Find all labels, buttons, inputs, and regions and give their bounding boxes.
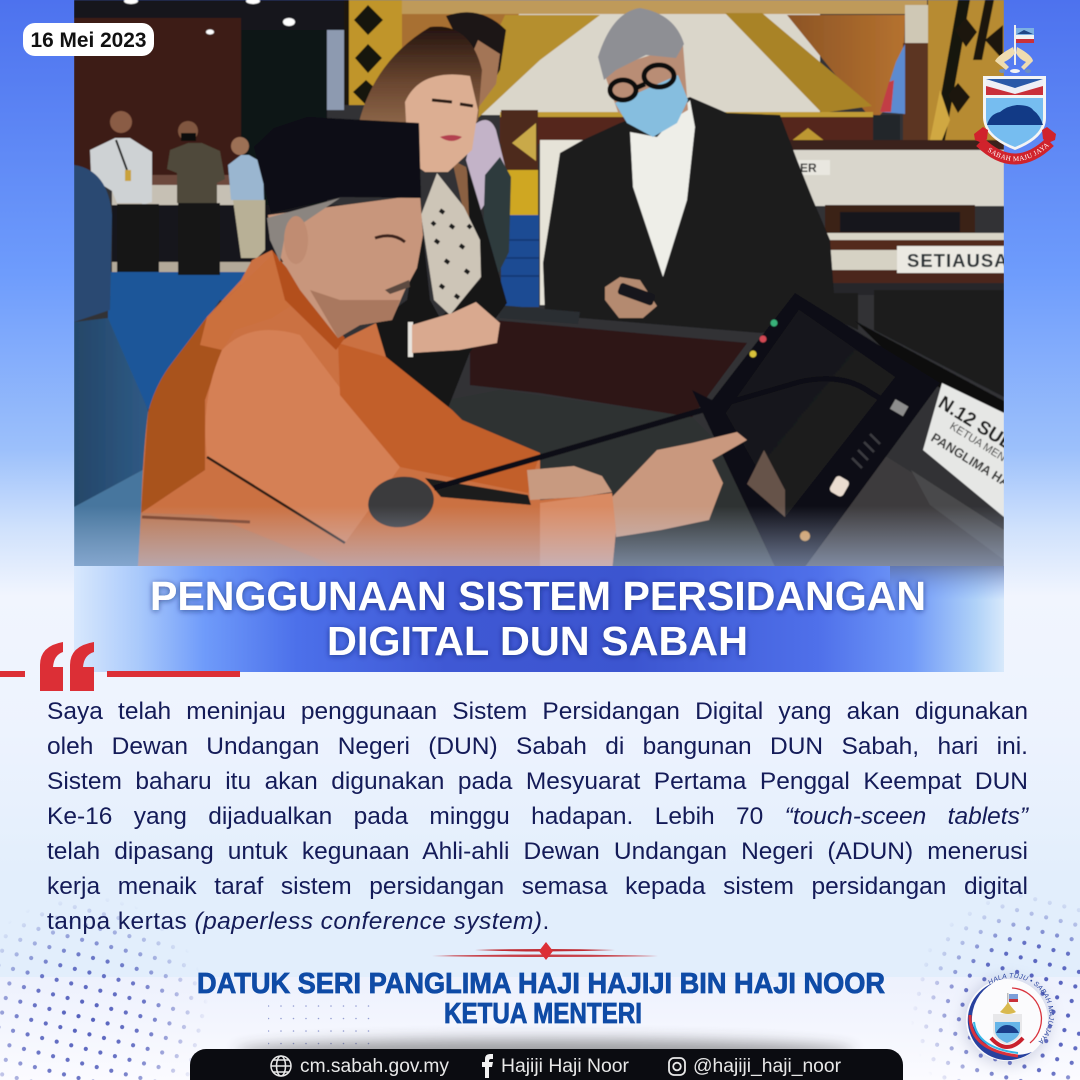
brown wall	[74, 18, 241, 180]
eye	[375, 236, 405, 242]
wood wall right	[787, 15, 905, 115]
swoosh cyan	[974, 1022, 1018, 1053]
banner top right shade	[890, 566, 1004, 600]
white back panel	[539, 139, 584, 306]
decorative quote rule left	[0, 671, 25, 677]
decorative quote rule right	[107, 671, 240, 677]
gold lattice left	[344, 0, 402, 105]
instagram handle: @hajiji_haji_noor	[693, 1056, 842, 1077]
light column	[327, 30, 344, 110]
plate base	[911, 470, 1004, 560]
back desk	[112, 175, 352, 272]
face and neck	[268, 195, 423, 338]
marble desk	[792, 149, 1004, 207]
ear	[284, 216, 308, 264]
flag behind	[880, 44, 905, 114]
dot pattern bottom right	[914, 894, 1080, 1080]
blazer	[372, 167, 507, 408]
photo bottom fade	[74, 506, 1004, 568]
quote body text	[47, 698, 1029, 935]
quotation mark	[40, 642, 94, 691]
swoosh blue	[968, 983, 1032, 1060]
quote body text: tanpa kertas (paperless conference system).	[47, 908, 550, 935]
fold line	[207, 457, 345, 543]
table surface	[440, 390, 1004, 570]
name plate: N.12 SULA	[934, 392, 1028, 462]
shield	[983, 76, 1046, 150]
back man blue shirt	[228, 137, 265, 258]
footer shadow	[235, 1039, 855, 1065]
quote body text: Sistem baharu itu akan digunakan pada Mesyuarat Pertama Penggal Keempat DUN	[47, 768, 1028, 795]
fold line lower	[142, 517, 250, 522]
dot pattern bottom left	[0, 900, 205, 1080]
date pill: 16 Mei 2023	[30, 29, 146, 52]
blue carpet	[107, 271, 246, 410]
lit shoulder	[200, 255, 300, 350]
speaker name: DATUK SERI PANGLIMA HAJI HAJIJI BIN HAJI NOOR	[197, 968, 885, 1000]
mask	[615, 75, 688, 137]
name plate: PANGLIMA HAJI	[928, 430, 1022, 496]
glasses	[610, 65, 674, 100]
title banner	[74, 566, 1004, 672]
face	[603, 45, 688, 132]
black chair backs	[834, 290, 1004, 396]
instagram icon	[669, 1058, 685, 1075]
eyes and lips	[432, 100, 473, 141]
facebook name: Hajiji Haji Noor	[501, 1056, 630, 1077]
name plate: KETUA MENTE	[947, 420, 1020, 472]
collar	[272, 250, 345, 350]
facebook icon	[482, 1054, 493, 1078]
photo: chief minister using digital conference tablet	[74, 0, 1028, 570]
gold panel	[501, 110, 538, 218]
shirt	[630, 100, 695, 277]
hardware buttons	[750, 320, 850, 541]
setiausaha nameplate: SETIAUSA	[907, 250, 1009, 271]
dark wood right	[902, 42, 929, 140]
swoosh red	[970, 1015, 1018, 1056]
marble wall	[470, 12, 820, 115]
spotlights	[124, 0, 295, 34]
badge text	[990, 978, 1049, 1045]
mini shield	[993, 1014, 1022, 1045]
moustache	[385, 280, 410, 294]
phone on desk	[498, 305, 580, 324]
reflection	[747, 450, 785, 517]
suit	[543, 97, 836, 333]
baju body	[138, 250, 616, 570]
tablet	[692, 293, 940, 567]
divider with diamond	[432, 942, 658, 960]
man with mask	[543, 8, 836, 333]
shaded back	[141, 285, 241, 513]
tablet body	[692, 293, 940, 567]
white cuff	[408, 322, 413, 357]
shaded jaw	[310, 290, 400, 338]
leopard blouse	[421, 173, 481, 315]
mini mountain	[996, 1025, 1019, 1033]
quote body text: Saya telah meninjau penggunaan Sistem Persidangan Digital yang akan digunakan	[47, 698, 1028, 725]
back man olive shirt	[167, 121, 225, 275]
gold fretwork left	[465, 15, 600, 118]
title line 1: PENGGUNAAN SISTEM PERSIDANGAN	[150, 573, 926, 619]
blue chair	[74, 165, 148, 570]
woman	[359, 27, 507, 408]
speaker role: KETUA MENTERI	[444, 998, 642, 1030]
nameplate rail and base	[855, 321, 1004, 420]
lower background band	[0, 977, 1080, 1080]
gold fretwork right	[725, 13, 872, 113]
ornaments	[999, 69, 1031, 73]
room base	[74, 0, 1004, 570]
wall and vents	[905, 5, 930, 45]
desk top strip	[789, 139, 1004, 150]
footer bar	[190, 1049, 903, 1080]
grey hair	[267, 198, 340, 262]
website: cm.sabah.gov.my	[300, 1056, 450, 1077]
desk slot	[825, 205, 975, 235]
tablet screen	[726, 310, 895, 517]
date pill	[23, 23, 154, 56]
ribbon: SABAH MAJU JAYA	[988, 144, 1050, 162]
small dot pattern	[268, 1005, 370, 1051]
quote body text: oleh Dewan Undangan Negeri (DUN) Sabah di bangunan DUN Sabah, hari ini.	[47, 733, 1028, 760]
speaker vents	[852, 434, 880, 468]
face	[405, 74, 478, 172]
round badge: HALA TUJU • SABAH MAJU JAYA	[988, 973, 1054, 1044]
hijab woman	[466, 120, 511, 280]
badge shadow	[963, 977, 1051, 1065]
hand holding phone	[605, 277, 657, 318]
title line 2: DIGITAL DUN SABAH	[327, 618, 748, 664]
arms	[995, 47, 1033, 70]
sleeve cuff	[540, 493, 616, 570]
back man white shirt	[90, 111, 159, 272]
console wood	[500, 112, 900, 144]
left ceiling	[74, 0, 344, 30]
man behind woman	[446, 12, 506, 108]
name plate	[923, 383, 1028, 517]
quote body text: telah dipasang untuk kegunaan Ahli-ahli Dewan Undangan Negeri (ADUN) menerusi	[47, 838, 1028, 865]
hair	[359, 27, 482, 150]
globe icon	[271, 1056, 291, 1076]
quote body text: kerja menaik taraf sistem persidangan semasa kepada sistem persidangan digital	[47, 873, 1028, 900]
wooden desk front	[470, 318, 747, 417]
songkok man	[138, 117, 616, 570]
mini ribbon	[991, 1038, 1023, 1047]
desk label: ER	[800, 161, 817, 175]
chest	[338, 343, 540, 493]
gold lattice right	[928, 0, 1004, 140]
sleeve	[205, 330, 400, 543]
blue stairs	[501, 215, 539, 307]
microphone	[364, 379, 908, 532]
songkok	[254, 117, 421, 213]
hand	[412, 302, 500, 353]
black gap under sleeve	[425, 478, 531, 505]
red arc	[1012, 988, 1041, 1043]
Sabah state crest	[974, 25, 1056, 164]
lower body	[138, 513, 345, 570]
mini flag and arms	[1000, 993, 1018, 1014]
ceiling band	[402, 0, 927, 14]
right table grey	[780, 440, 1004, 570]
flag	[1014, 25, 1034, 65]
setiausaha desk	[826, 232, 1004, 294]
hair strand	[452, 160, 482, 285]
dark panel	[240, 30, 327, 206]
badge disc	[966, 979, 1048, 1061]
mini shield field	[995, 1022, 1020, 1043]
title	[150, 573, 926, 664]
left hand	[527, 466, 612, 500]
quote body text: Ke-16 yang dijadualkan pada minggu hadapan. Lebih 70 “touch-sceen tablets”	[47, 803, 1028, 830]
grey hair	[598, 8, 684, 80]
pointing hand	[612, 432, 747, 537]
round badge	[958, 973, 1056, 1070]
desk label	[797, 160, 830, 175]
upper wood panel	[402, 14, 520, 48]
